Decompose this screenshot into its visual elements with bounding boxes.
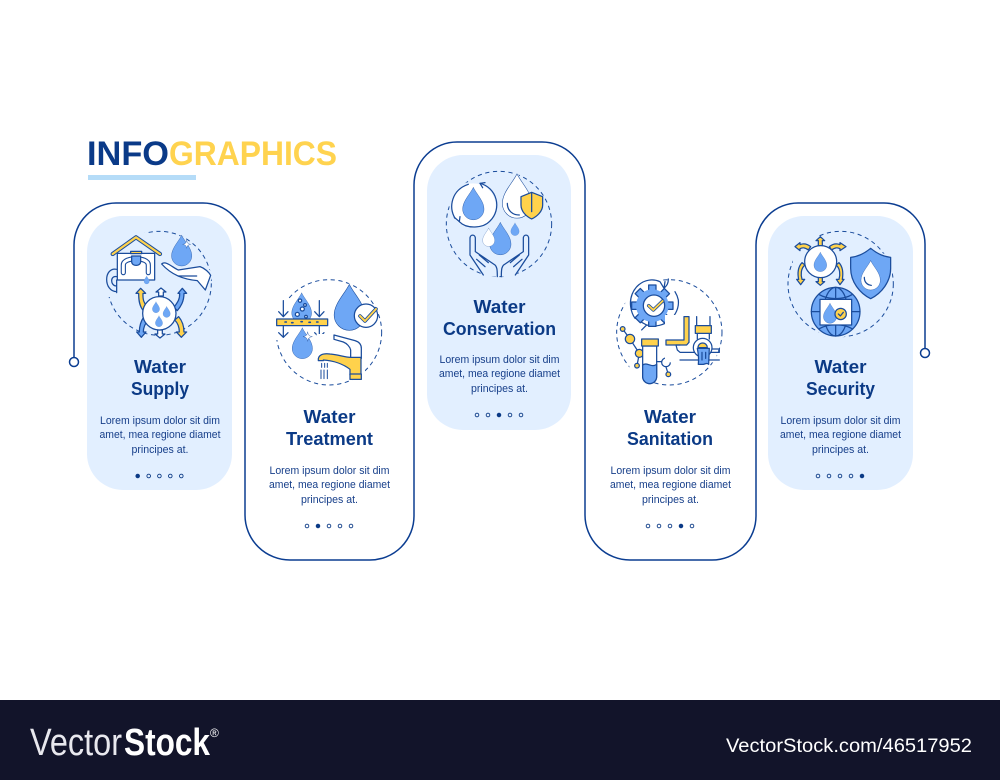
card background [87, 216, 232, 490]
body text: principes at. [301, 494, 358, 506]
connector outline [70, 142, 930, 560]
footer image id: VectorStock.com/46517952 [726, 736, 972, 757]
body text: principes at. [132, 444, 188, 456]
heading [806, 356, 876, 399]
icon: water supply [105, 231, 211, 338]
panel: water supply [87, 216, 232, 490]
heading: Security [806, 378, 876, 399]
heading [286, 406, 373, 449]
heading: Treatment [286, 428, 373, 449]
body text [269, 465, 390, 506]
body text: amet, mea regione diamet [100, 429, 220, 441]
heading: Water [134, 356, 186, 377]
title: GRAPHICS [169, 135, 337, 173]
body text: Lorem ipsum dolor sit dim [610, 465, 731, 477]
footer logo: Vector [30, 722, 122, 764]
icon: water security [788, 231, 893, 338]
heading: Conservation [443, 318, 556, 339]
card background [427, 155, 571, 430]
body text: principes at. [471, 383, 528, 395]
footer logo: Stock [124, 722, 211, 764]
body text [100, 415, 220, 456]
title underline [88, 175, 196, 180]
body text: Lorem ipsum dolor sit dim [780, 415, 901, 427]
panel: water sanitation [610, 278, 731, 528]
footer bar [0, 700, 1000, 780]
page dots [646, 524, 694, 528]
icon: water treatment [273, 280, 382, 385]
icon: water conservation [446, 171, 552, 277]
body text: Lorem ipsum dolor sit dim [100, 415, 220, 427]
page dots [475, 413, 523, 417]
heading: Water [474, 296, 526, 317]
heading [443, 296, 556, 339]
panel: water conservation [427, 155, 571, 430]
page dots [816, 474, 864, 478]
heading [627, 406, 713, 449]
body text [439, 354, 560, 395]
body text: amet, mea regione diamet [269, 479, 390, 491]
heading: Sanitation [627, 428, 713, 449]
body text: Lorem ipsum dolor sit dim [440, 354, 560, 366]
body text: principes at. [642, 494, 699, 506]
body text [610, 465, 731, 506]
body text: Lorem ipsum dolor sit dim [270, 465, 390, 477]
title [87, 135, 337, 173]
body text [780, 415, 901, 456]
icon: water sanitation [617, 278, 722, 385]
panel: water security [768, 216, 913, 490]
heading: Supply [131, 378, 190, 399]
card background [768, 216, 913, 490]
body text: amet, mea regione diamet [439, 368, 560, 380]
footer logo: ® [210, 726, 219, 740]
page dots [305, 524, 353, 528]
page dots [136, 474, 183, 478]
heading: Water [814, 356, 866, 377]
body text: amet, mea regione diamet [780, 429, 901, 441]
footer logo [30, 722, 219, 764]
heading [131, 356, 190, 399]
heading: Water [304, 406, 356, 427]
title: INFO [87, 135, 169, 173]
body text: principes at. [812, 444, 869, 456]
heading: Water [644, 406, 696, 427]
panel: water treatment [269, 280, 390, 528]
body text: amet, mea regione diamet [610, 479, 731, 491]
